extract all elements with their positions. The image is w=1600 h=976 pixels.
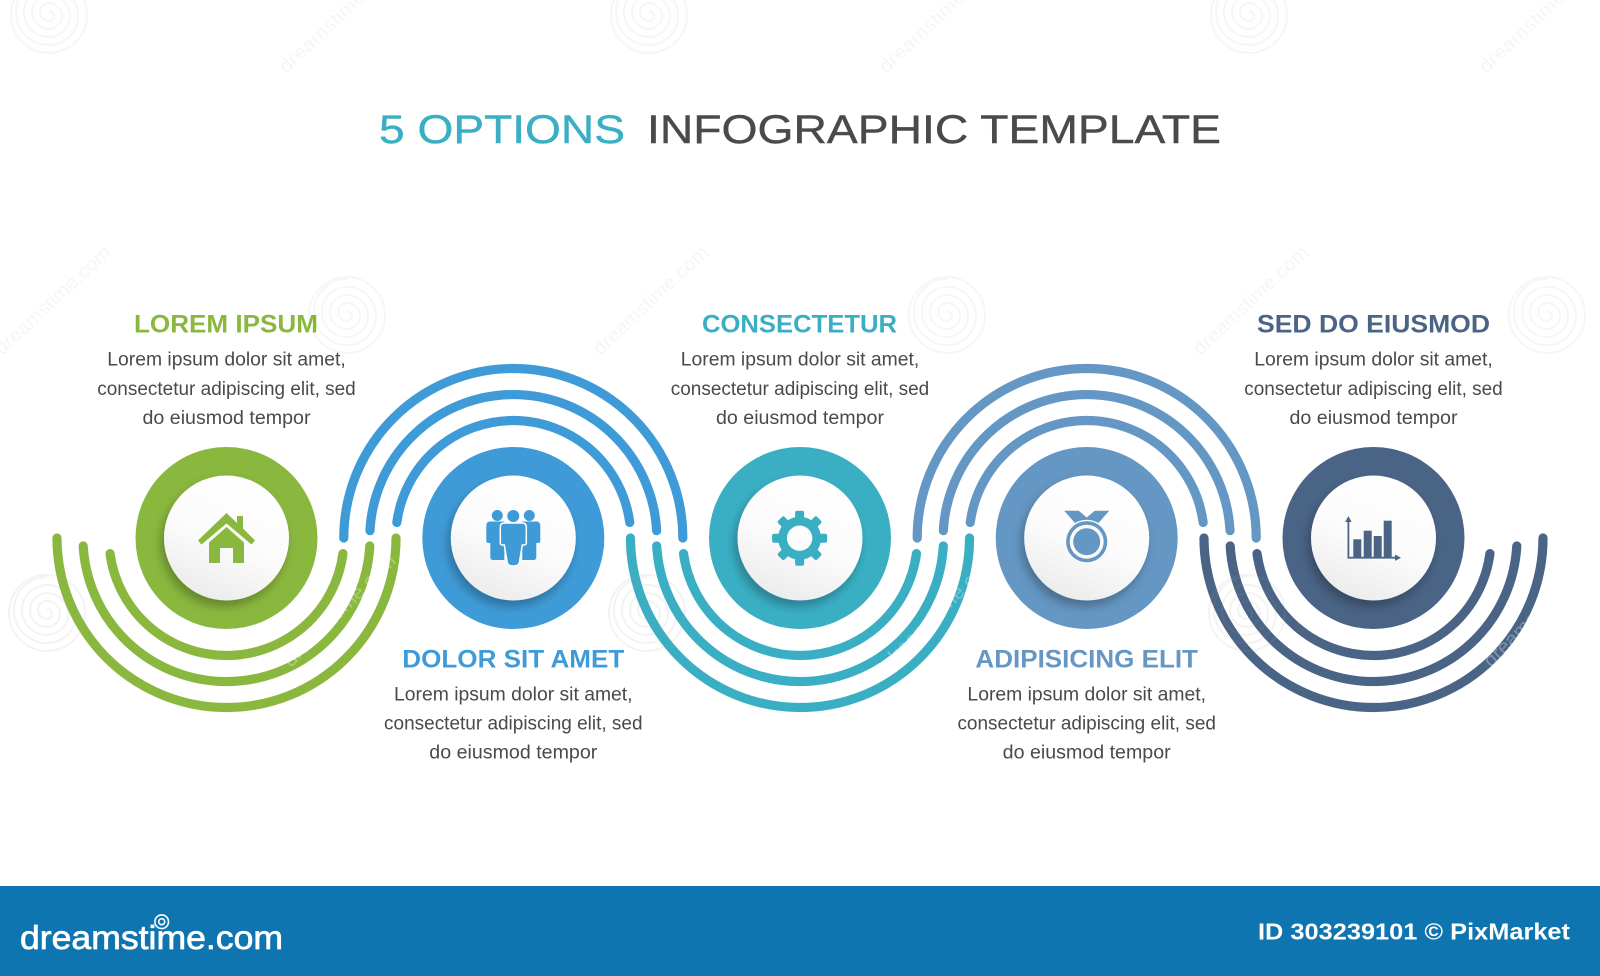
icon: medal xyxy=(1064,511,1109,564)
description xyxy=(1244,350,1503,429)
footer logo xyxy=(20,915,283,956)
option 2: dolor sit amet xyxy=(344,368,683,764)
heading: DOLOR SIT AMET xyxy=(402,645,624,673)
option 1: lorem ipsum xyxy=(57,311,396,708)
description xyxy=(671,350,929,429)
heading: SED DO EIUSMOD xyxy=(1257,311,1490,339)
description xyxy=(957,684,1216,764)
description: Lorem ipsum dolor sit amet, xyxy=(394,684,633,705)
ring: green xyxy=(136,447,318,629)
description: do eiusmod tempor xyxy=(1290,408,1458,429)
title: 5 options: 5 OPTIONS xyxy=(379,108,625,152)
title xyxy=(379,108,1221,152)
arcs: steel blue top xyxy=(917,368,1256,538)
description: Lorem ipsum dolor sit amet, xyxy=(681,350,919,371)
option 3: consectetur xyxy=(630,311,970,708)
white disc xyxy=(451,476,576,600)
description: consectetur adipiscing elit, sed xyxy=(957,714,1216,734)
icon: house xyxy=(198,513,255,563)
description: Lorem ipsum dolor sit amet, xyxy=(107,350,346,371)
white disc xyxy=(738,476,862,600)
option 5: sed do eiusmod xyxy=(1204,311,1543,708)
text: dreamstime.com xyxy=(589,242,713,360)
icon: gear xyxy=(772,511,827,566)
description: consectetur adipiscing elit, sed xyxy=(1244,379,1503,400)
text: dreamstime.com xyxy=(1480,551,1600,672)
description xyxy=(97,350,356,429)
icon: bar chart xyxy=(1345,516,1401,561)
title: infographic template: INFOGRAPHIC TEMPLATE xyxy=(647,108,1221,152)
description: do eiusmod tempor xyxy=(142,408,311,429)
logo wordmark: dreamstime.com xyxy=(20,919,283,956)
text: dreamstime.com xyxy=(280,551,401,672)
description: Lorem ipsum dolor sit amet, xyxy=(1254,350,1493,371)
arcs: blue top xyxy=(344,368,683,538)
logo spiral xyxy=(155,915,168,928)
description: do eiusmod tempor xyxy=(429,743,598,764)
icon: people xyxy=(486,510,540,566)
heading: LOREM IPSUM xyxy=(134,311,318,339)
description: consectetur adipiscing elit, sed xyxy=(671,379,929,400)
text: dreamstime.com xyxy=(880,551,1001,672)
option 4: adipisicing elit xyxy=(917,368,1256,764)
description xyxy=(384,684,643,764)
description: do eiusmod tempor xyxy=(1003,743,1171,764)
ring: teal xyxy=(709,447,891,629)
white disc xyxy=(1024,476,1149,600)
ring: steel blue xyxy=(996,447,1178,629)
footer image id: ID 303239101 © PixMarket xyxy=(1258,918,1570,944)
description: consectetur adipiscing elit, sed xyxy=(384,714,643,734)
description: consectetur adipiscing elit, sed xyxy=(97,379,356,400)
heading: CONSECTETUR xyxy=(702,311,897,339)
ring: blue xyxy=(422,447,604,629)
white disc xyxy=(1311,476,1436,600)
arcs: navy bottom xyxy=(1204,538,1543,708)
description: Lorem ipsum dolor sit amet, xyxy=(967,684,1206,705)
text: dreamstime.com xyxy=(1189,242,1313,360)
footer bar xyxy=(0,886,1600,976)
heading: ADIPISICING ELIT xyxy=(975,645,1198,673)
ring: navy xyxy=(1282,447,1464,629)
description: do eiusmod tempor xyxy=(716,408,885,429)
arcs: green bottom xyxy=(57,538,396,708)
white disc xyxy=(164,476,289,600)
arcs: teal bottom xyxy=(630,538,970,708)
